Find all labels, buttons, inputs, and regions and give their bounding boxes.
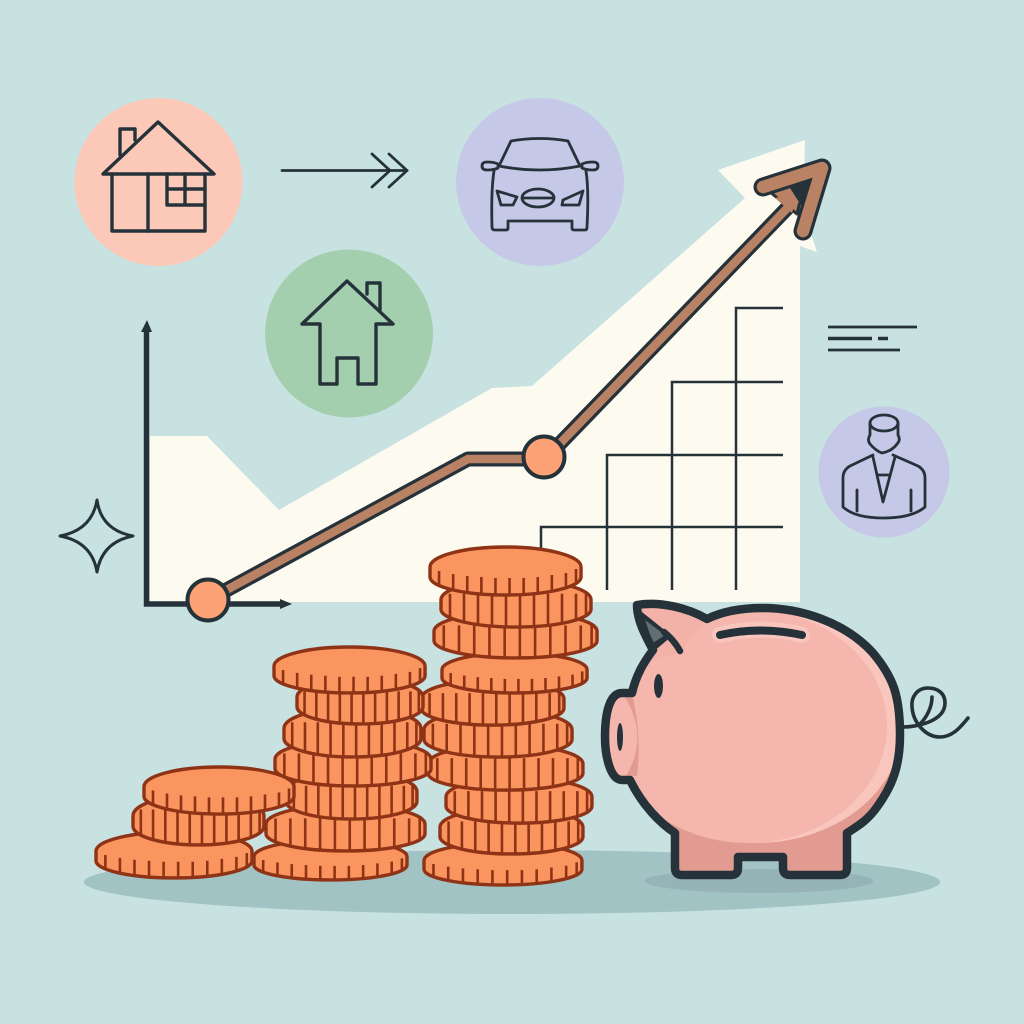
pig ear	[637, 608, 680, 652]
pig coin slot	[720, 630, 802, 635]
ground shadow	[84, 850, 940, 914]
coin	[446, 778, 592, 823]
coin	[284, 708, 421, 757]
pig tail	[903, 688, 968, 737]
icon: green house badge	[265, 250, 433, 418]
piggy bank	[600, 600, 968, 880]
coin stack: short left	[96, 767, 294, 878]
pig eye	[654, 674, 663, 698]
coin	[441, 580, 591, 627]
icon: peach house badge	[74, 98, 242, 266]
coin	[144, 767, 294, 814]
coin	[266, 805, 425, 851]
pig nostril	[617, 723, 623, 751]
coin	[286, 772, 417, 819]
chart node: mid	[524, 436, 564, 478]
coin	[442, 653, 587, 693]
growth arrow line	[208, 168, 822, 600]
infographic canvas	[58, 98, 970, 914]
coin stack: tall right	[421, 547, 597, 885]
coin	[434, 612, 597, 658]
coin	[254, 840, 407, 880]
coin stack: middle	[254, 647, 431, 880]
icon: purple car badge	[456, 98, 624, 266]
coin	[133, 795, 264, 845]
coin	[428, 745, 583, 790]
coin	[424, 710, 572, 757]
coin	[297, 678, 423, 724]
icon: person badge	[818, 406, 950, 538]
chart node: start	[188, 580, 228, 620]
chart area: cream rising arrow	[150, 140, 817, 602]
coin	[424, 843, 582, 885]
coin	[275, 740, 431, 786]
chart axes	[141, 320, 292, 609]
coin	[421, 680, 564, 725]
coin	[274, 647, 425, 693]
pig body fill	[609, 608, 896, 871]
coin	[430, 547, 581, 595]
pig shadow	[645, 869, 873, 893]
icon: sparkle	[60, 500, 133, 572]
text lines placeholder	[828, 327, 917, 350]
coin	[96, 832, 252, 878]
pig outline	[605, 604, 900, 875]
coin	[440, 808, 583, 854]
arrow: double chevron	[282, 154, 407, 187]
stepped grid	[541, 308, 783, 590]
